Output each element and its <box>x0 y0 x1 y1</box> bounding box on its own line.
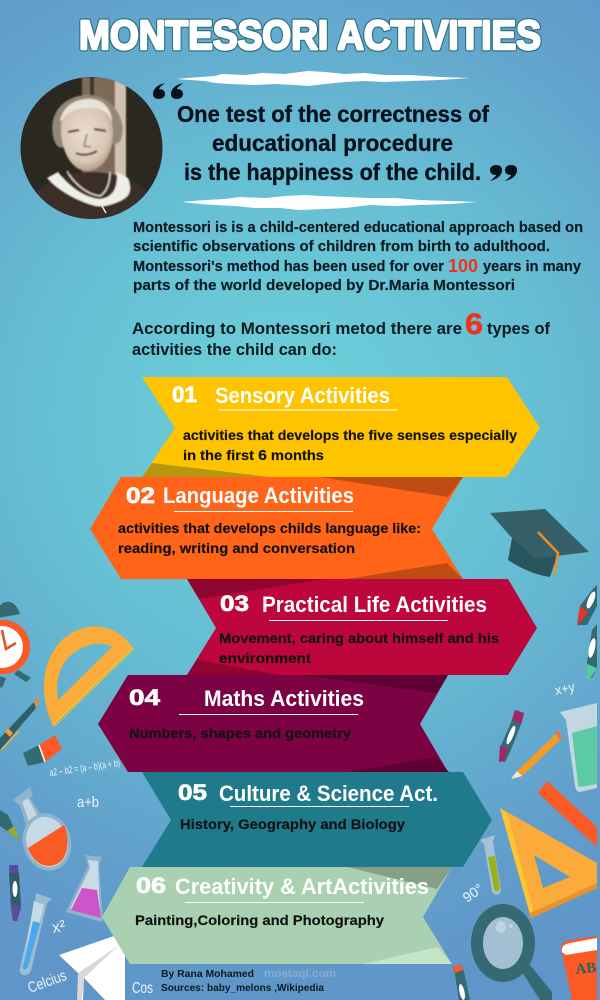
quote text: educational procedure <box>212 130 453 156</box>
panel: 03 practical life activities: 03 <box>220 591 249 616</box>
icon: pencil <box>511 730 562 779</box>
icon: set square <box>500 808 597 918</box>
credits <box>161 968 324 994</box>
panel: 03 practical life activities: Practical Life Activities <box>262 592 487 617</box>
icon: crayon bottom <box>453 964 470 1000</box>
panel: 04 maths activities: Maths Activities <box>204 686 364 711</box>
panel: 05 culture and science: Culture & Science Act. <box>219 781 438 806</box>
title: MONTESSORI ACTIVITIES <box>79 12 541 58</box>
panel: 06 creativity and art: 06 <box>136 873 166 898</box>
icon: alarm clock <box>0 602 31 688</box>
icon: book: AB <box>575 960 597 978</box>
panel: 02 language activities: 02 <box>126 483 155 508</box>
intro paragraph: 100 <box>448 256 478 276</box>
panel: 02 language activities <box>90 477 463 579</box>
quote mark open <box>153 83 183 99</box>
icon: green crayon <box>586 624 597 679</box>
icon: book <box>561 936 597 1000</box>
panel: 04 maths activities: 04 <box>129 685 161 710</box>
panel: 01 sensory activities: 01 <box>172 382 197 407</box>
panel: 05 culture and science: 05 <box>178 780 207 805</box>
label: x squared: x² <box>51 918 67 937</box>
icon: test tube <box>20 893 52 975</box>
panel: 04 maths activities: Numbers, shapes and geometry <box>129 725 351 741</box>
quote text <box>177 101 489 185</box>
intro paragraph: parts of the world developed by Dr.Maria Montessori <box>133 277 515 294</box>
label: Celcius: Celcius <box>26 967 69 997</box>
panel: 03 practical life activities: environment <box>219 650 311 666</box>
label: formula: a2 – b2 = (a – b)(a + b) <box>49 758 121 779</box>
panel: 02 language activities: reading, writing and conversation <box>118 540 355 556</box>
icon: pen <box>0 695 39 750</box>
icon: conical flask <box>66 855 103 922</box>
panel: 01 sensory activities: in the first 6 months <box>183 447 324 464</box>
quote mark close <box>490 165 517 181</box>
lead-in sentence: According to Montessori metod there are <box>132 319 462 338</box>
icon: round flask <box>13 787 72 871</box>
quote text: One test of the correctness of <box>177 101 489 127</box>
panel: 01 sensory activities: activities that develops the five senses especially <box>183 427 517 443</box>
lead-in sentence: activities the child can do: <box>132 340 337 359</box>
icon: ruler <box>538 781 597 847</box>
icon: small test tube <box>480 835 501 895</box>
panel: 02 language activities: Language Activities <box>163 483 354 508</box>
decorations: school objects <box>0 509 597 1000</box>
icon: protractor <box>44 627 133 726</box>
panel: 04 maths activities <box>98 675 449 772</box>
lead-in sentence <box>132 308 550 359</box>
panel: 05 culture and science: History, Geography and Biology <box>180 816 405 832</box>
watermark: mostaql.com <box>264 968 336 980</box>
brush stroke top <box>176 71 470 86</box>
icon: purple crayon middle <box>499 710 524 762</box>
panel: 06 creativity and art: Painting,Coloring and Photography <box>135 912 384 928</box>
portrait: Maria Montessori <box>20 77 164 225</box>
icon: crayon left edge <box>0 810 19 840</box>
intro paragraph: years in many <box>483 258 582 275</box>
label: Cos: Cos <box>132 980 153 997</box>
brush stroke bottom <box>182 195 478 210</box>
panel: 03 practical life activities: Movement, caring about himself and his <box>219 630 499 646</box>
lead-in sentence: types of <box>487 319 550 338</box>
icon: eraser <box>23 735 62 766</box>
panel: 02 language activities: activities that develops childs language like: <box>118 520 421 536</box>
label: 90 degrees: 90° <box>460 880 486 905</box>
panel: 06 creativity and art: Creativity & ArtActivities <box>175 874 429 899</box>
panel: 03 practical life activities <box>187 579 537 675</box>
label: x+y: x+y <box>554 679 577 698</box>
icon: red crayon <box>577 585 597 626</box>
quote text: is the happiness of the child. <box>184 159 481 185</box>
credits: Sources: baby_melons ,Wikipedia <box>161 982 324 994</box>
panel: 05 culture and science <box>142 772 492 867</box>
icon: purple crayon <box>9 865 21 921</box>
credits: By Rana Mohamed <box>161 968 254 980</box>
intro paragraph: Montessori is is a child-centered educational approach based on <box>133 219 583 236</box>
icon: magnifying glass <box>471 904 552 1000</box>
intro paragraph: Montessori's method has been used for over <box>133 258 444 275</box>
label: a+b: a+b <box>77 794 99 811</box>
icon: paper plane <box>59 936 130 1000</box>
icon: beaker <box>560 703 597 792</box>
lead-in sentence: 6 <box>465 308 483 341</box>
icon: graduation cap <box>490 509 589 577</box>
intro paragraph <box>133 219 583 294</box>
panel: 01 sensory activities <box>142 377 540 477</box>
panel: 06 creativity and art <box>102 867 452 964</box>
panel: 01 sensory activities: Sensory Activities <box>215 383 390 408</box>
intro paragraph: scientific observations of children from birth to adulthood. <box>133 238 550 255</box>
title: MONTESSORI ACTIVITIES <box>79 12 541 58</box>
